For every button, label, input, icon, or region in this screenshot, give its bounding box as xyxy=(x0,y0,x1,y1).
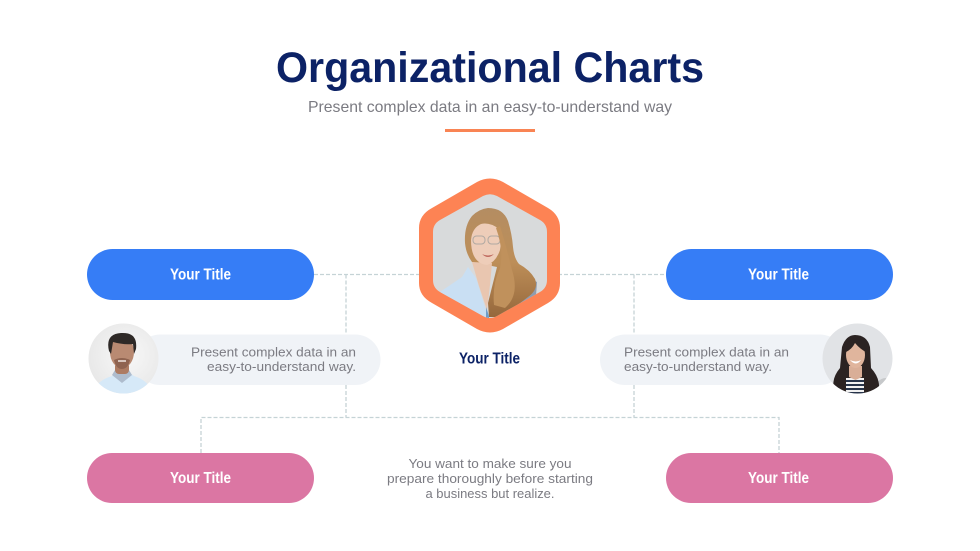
panel: right description: easy-to-understand way. xyxy=(624,359,772,374)
icon: woman portrait xyxy=(822,323,893,394)
center title: Your Title xyxy=(459,350,520,368)
panel: right description: Present complex data in an xyxy=(624,344,789,360)
pill: bottom left title xyxy=(87,453,314,503)
panel: left description: Present complex data in an xyxy=(191,344,356,360)
accent bar xyxy=(445,129,535,132)
pill: bottom left title: Your Title xyxy=(170,470,231,487)
bottom text block: prepare thoroughly before starting xyxy=(387,471,593,486)
pill: top left title: Your Title xyxy=(170,266,231,284)
pill: bottom right title: Your Title xyxy=(748,470,809,487)
bottom text block: You want to make sure you xyxy=(408,456,572,471)
bottom text block xyxy=(387,456,593,501)
panel: left description xyxy=(135,334,380,385)
icon: central portrait hexagon xyxy=(419,178,560,332)
panel: right description xyxy=(600,334,845,385)
subtitle: Present complex data in an easy-to-understand way xyxy=(308,99,672,116)
pill: top right title: Your Title xyxy=(748,266,809,284)
dashed connectors xyxy=(201,274,779,453)
pill: top right title xyxy=(666,249,893,300)
title: Organizational Charts xyxy=(276,44,704,92)
panel: left description: easy-to-understand way. xyxy=(207,359,356,374)
pill: bottom right title xyxy=(666,453,893,503)
icon: man portrait xyxy=(88,323,159,394)
pill: top left title xyxy=(87,249,314,300)
bottom text block: a business but realize. xyxy=(426,486,554,501)
